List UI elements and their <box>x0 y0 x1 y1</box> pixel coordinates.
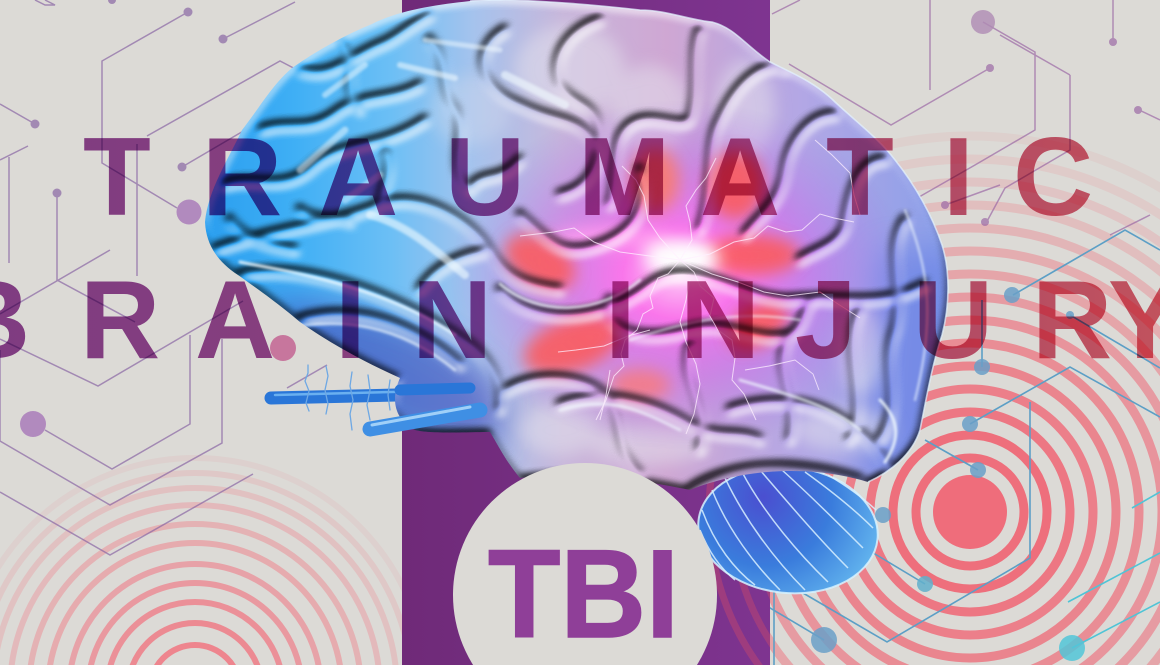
cerebellum <box>692 458 884 602</box>
brain illustration <box>180 0 980 602</box>
cerebrum body <box>205 0 948 490</box>
circuit nodes bottom right <box>811 287 1085 661</box>
circuit nodes top right <box>941 10 1142 226</box>
white highlights <box>240 40 927 462</box>
lower temporal shading <box>260 300 500 450</box>
circuit lines top right <box>772 0 1160 235</box>
embossed sulci shading <box>205 0 948 490</box>
pale gyri patches <box>430 25 895 465</box>
target centre <box>933 475 1007 549</box>
lower brain stem tube <box>370 410 480 429</box>
concentric target left <box>0 458 427 665</box>
title: TRAUMATIC: TRAUMATIC <box>83 115 1093 239</box>
badge text: TBI <box>488 525 679 664</box>
concentric target right <box>770 132 1160 665</box>
brain rim light <box>470 0 948 482</box>
red patches <box>495 148 800 401</box>
badge circle <box>453 463 717 665</box>
rings showing through bar <box>706 482 770 665</box>
purple centre bar <box>402 0 770 665</box>
brain stem tubes <box>271 365 480 430</box>
lightning arcs <box>520 140 860 434</box>
hot centre <box>550 228 720 276</box>
large nodes left <box>20 200 296 437</box>
electric core glow <box>468 117 878 438</box>
circuit lines left <box>0 0 327 555</box>
circuit lines bottom right <box>760 230 1160 665</box>
circuit nodes left <box>30 0 228 198</box>
